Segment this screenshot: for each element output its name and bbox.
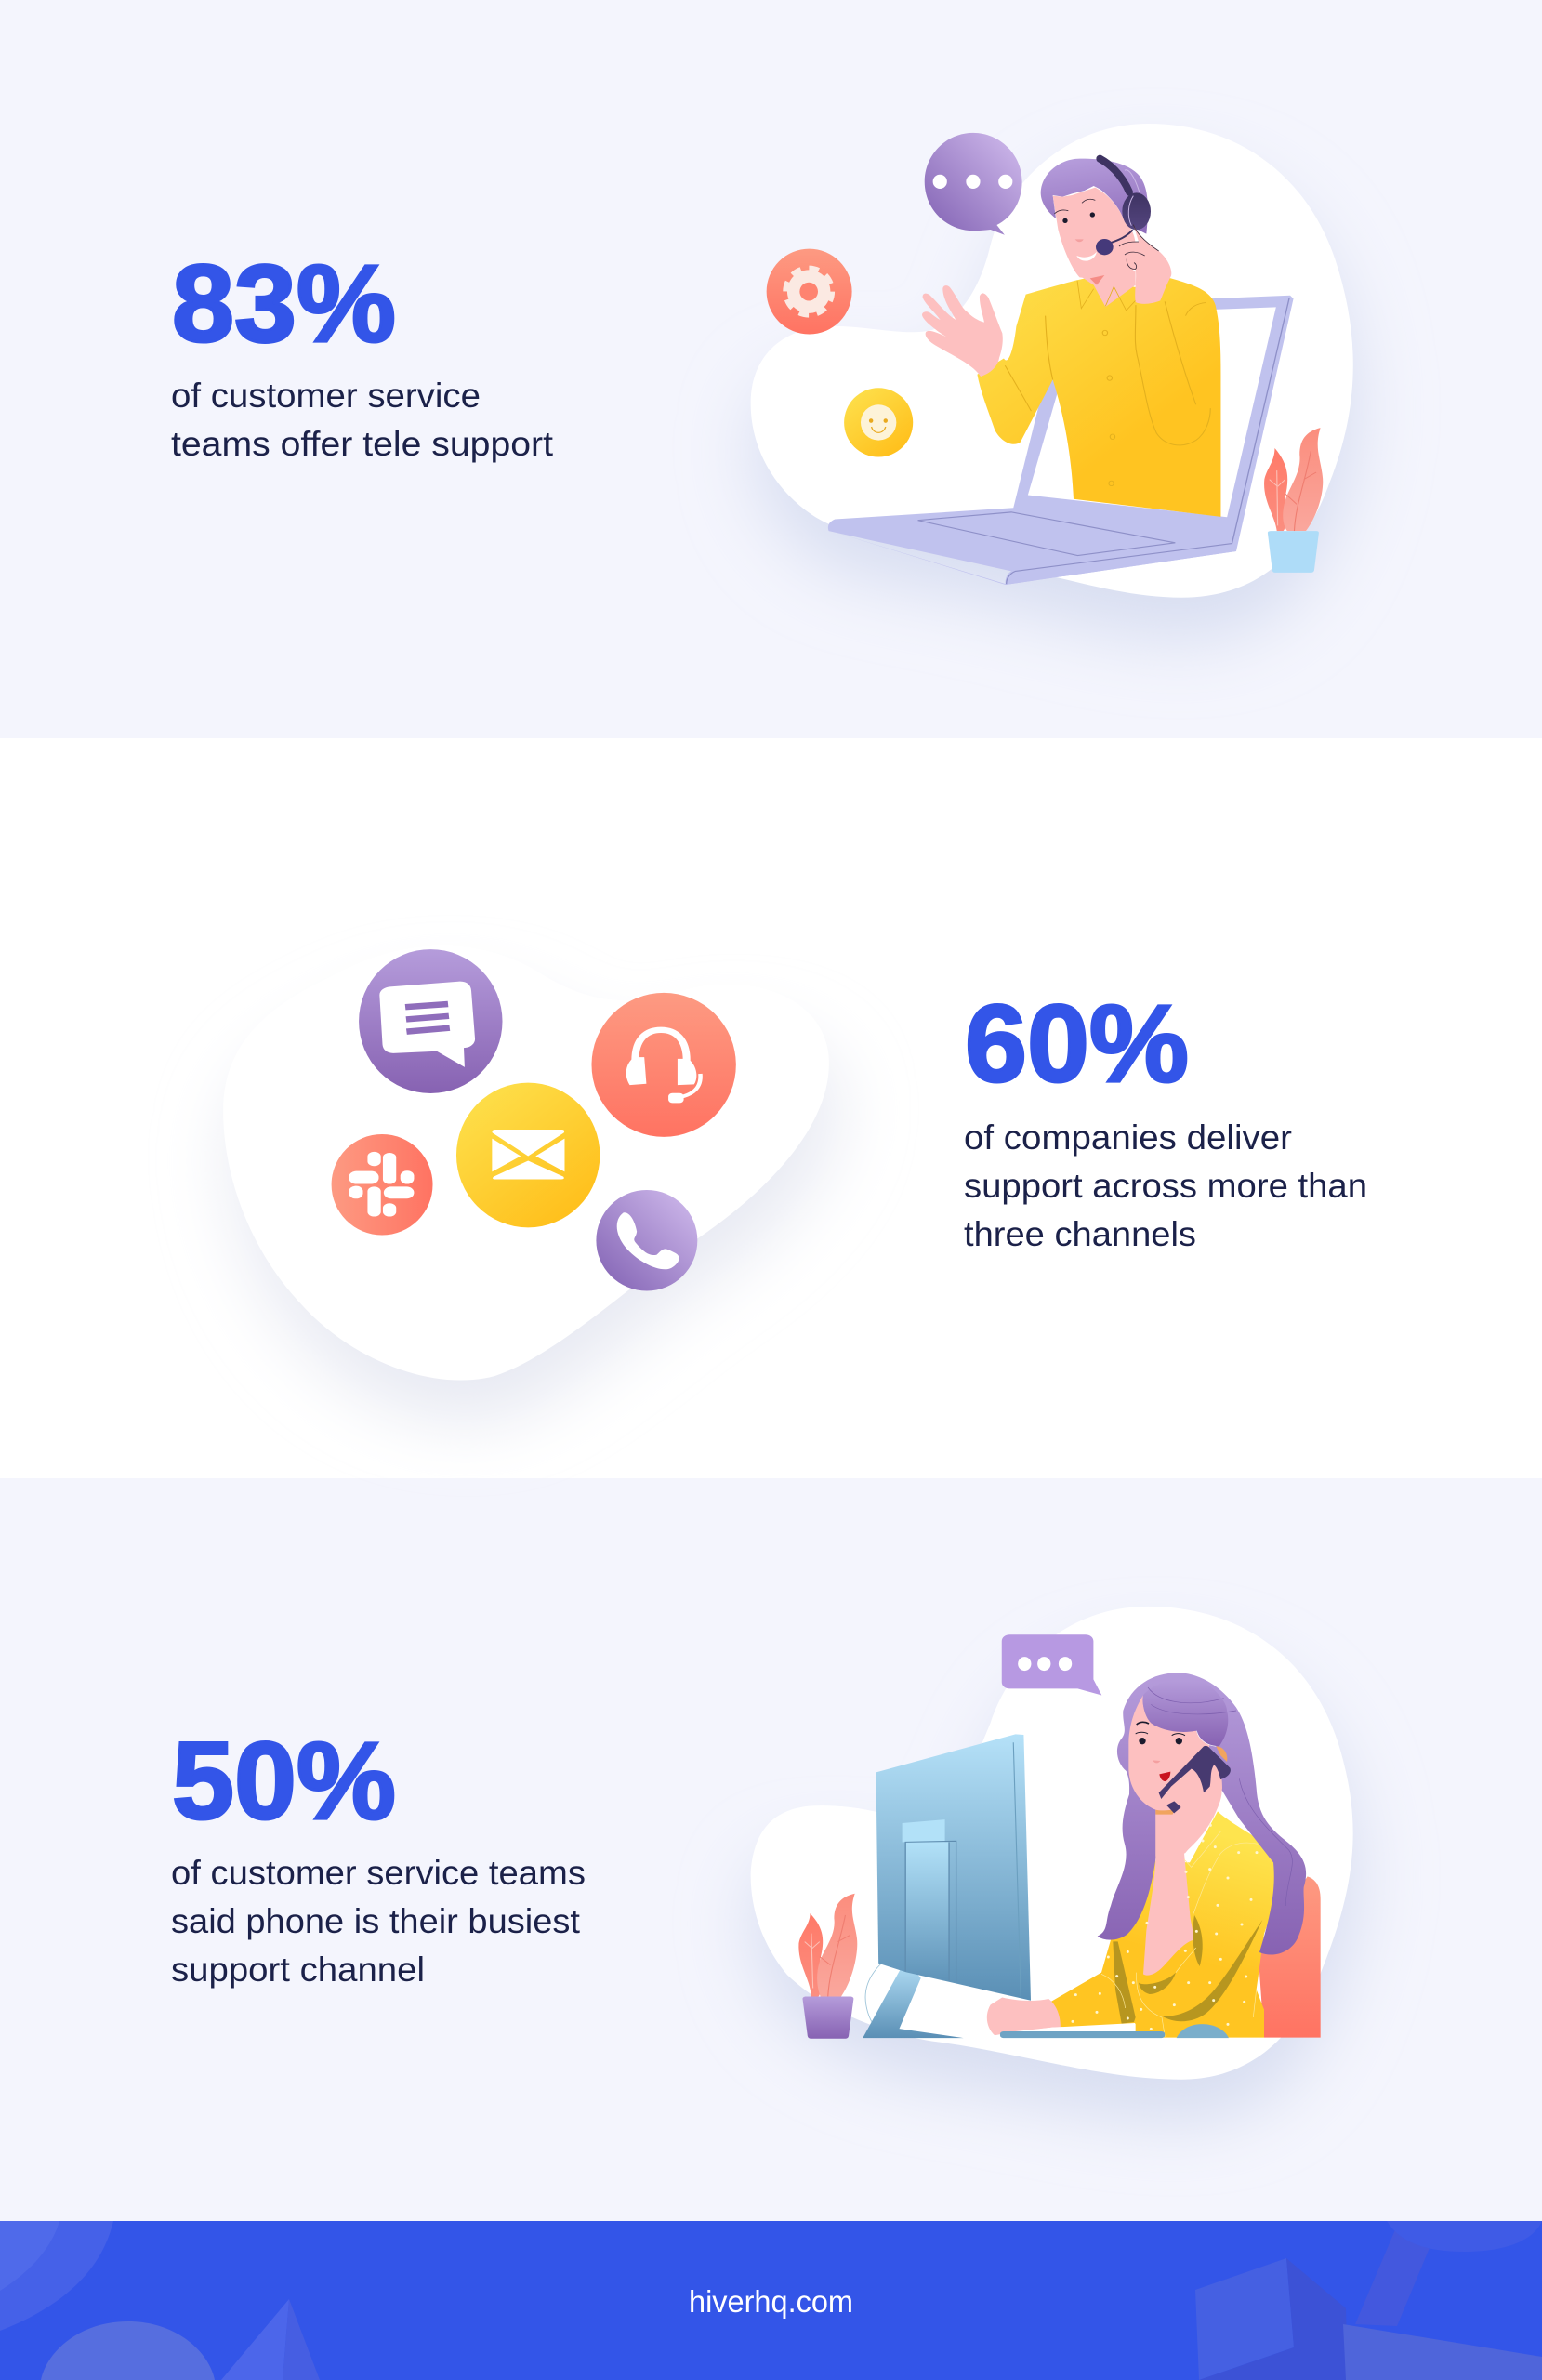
illustration: support channel icons <box>223 945 837 1423</box>
description 60%: of companies deliver <box>964 1118 1292 1157</box>
footer url: hiverhq.com <box>689 2284 853 2319</box>
agent head, headset and hands <box>922 159 1171 377</box>
potted plant <box>1264 428 1323 573</box>
headset <box>1096 159 1151 255</box>
phone <box>1159 1746 1231 1814</box>
long hair <box>1098 1673 1306 1955</box>
description 60%: support across more than <box>964 1167 1367 1205</box>
description 50% <box>171 1854 586 1989</box>
description 83% <box>171 377 554 463</box>
smiley icon <box>844 388 913 457</box>
hand on desk <box>987 1998 1061 2035</box>
chair <box>1258 1876 1321 2038</box>
stat block: 83% tele support <box>171 243 554 463</box>
description 50%: said phone is their busiest <box>171 1902 581 1940</box>
hand at headset <box>1119 225 1171 304</box>
hair <box>1041 159 1148 234</box>
description 50%: support channel <box>171 1950 425 1989</box>
shirt details <box>1005 301 1210 486</box>
phone icon <box>596 1190 697 1291</box>
illustration: woman on phone at monitor <box>751 1606 1357 2122</box>
shirt <box>1050 1811 1276 2038</box>
chat icon <box>359 949 503 1093</box>
description 60% <box>964 1118 1367 1253</box>
background band: lower section <box>0 1478 1542 2221</box>
mail icon <box>456 1083 600 1227</box>
speech bubble with dots <box>1002 1634 1101 1696</box>
neck <box>1080 271 1136 307</box>
woman figure <box>1050 1673 1321 2038</box>
description 50%: of customer service teams <box>171 1854 586 1892</box>
background band: middle section <box>0 738 1542 1478</box>
facial features <box>1054 199 1104 285</box>
collar lines <box>1077 281 1136 311</box>
shirt drapes and dots <box>1072 1824 1262 2037</box>
face <box>1128 1695 1210 1810</box>
white blob <box>751 1606 1353 2080</box>
keyboard and mouse <box>1000 2023 1229 2038</box>
footer band <box>0 2221 1542 2380</box>
big number 60%: 60% <box>965 983 1189 1105</box>
illustration: support agent on laptop <box>751 124 1357 641</box>
blob shadow <box>755 166 1357 641</box>
laptop <box>828 296 1294 585</box>
description 83%: of customer service <box>171 377 481 415</box>
background band: top section <box>0 0 1542 738</box>
headset icon <box>591 993 736 1137</box>
waving hand <box>922 285 1003 377</box>
neck, chest and arm <box>1143 1765 1222 1976</box>
big number 50%: 50% <box>172 1720 396 1843</box>
slack icon <box>332 1134 433 1236</box>
potted plant <box>798 1894 857 2039</box>
white blob <box>223 945 829 1381</box>
facial features <box>1136 1722 1227 1816</box>
stat block: 50% phone <box>171 1720 586 1989</box>
description 60%: three channels <box>964 1215 1196 1253</box>
agent shirt <box>977 277 1220 517</box>
stat block: 60% channels <box>964 983 1367 1253</box>
footer decorative shapes <box>0 2221 1542 2380</box>
speech bubble with dots <box>925 133 1022 235</box>
blob shadow <box>755 1649 1357 2122</box>
blob shadow <box>231 988 837 1423</box>
hand holding phone <box>1155 1765 1221 1857</box>
description 83%: teams offer tele support <box>171 425 554 463</box>
monitor <box>876 1734 1031 2001</box>
monitor stand <box>863 1950 964 2038</box>
white blob <box>751 124 1353 598</box>
gear icon <box>767 249 852 335</box>
hair front <box>1143 1680 1292 1906</box>
big number 83%: 83% <box>172 243 396 365</box>
face <box>1053 188 1136 279</box>
